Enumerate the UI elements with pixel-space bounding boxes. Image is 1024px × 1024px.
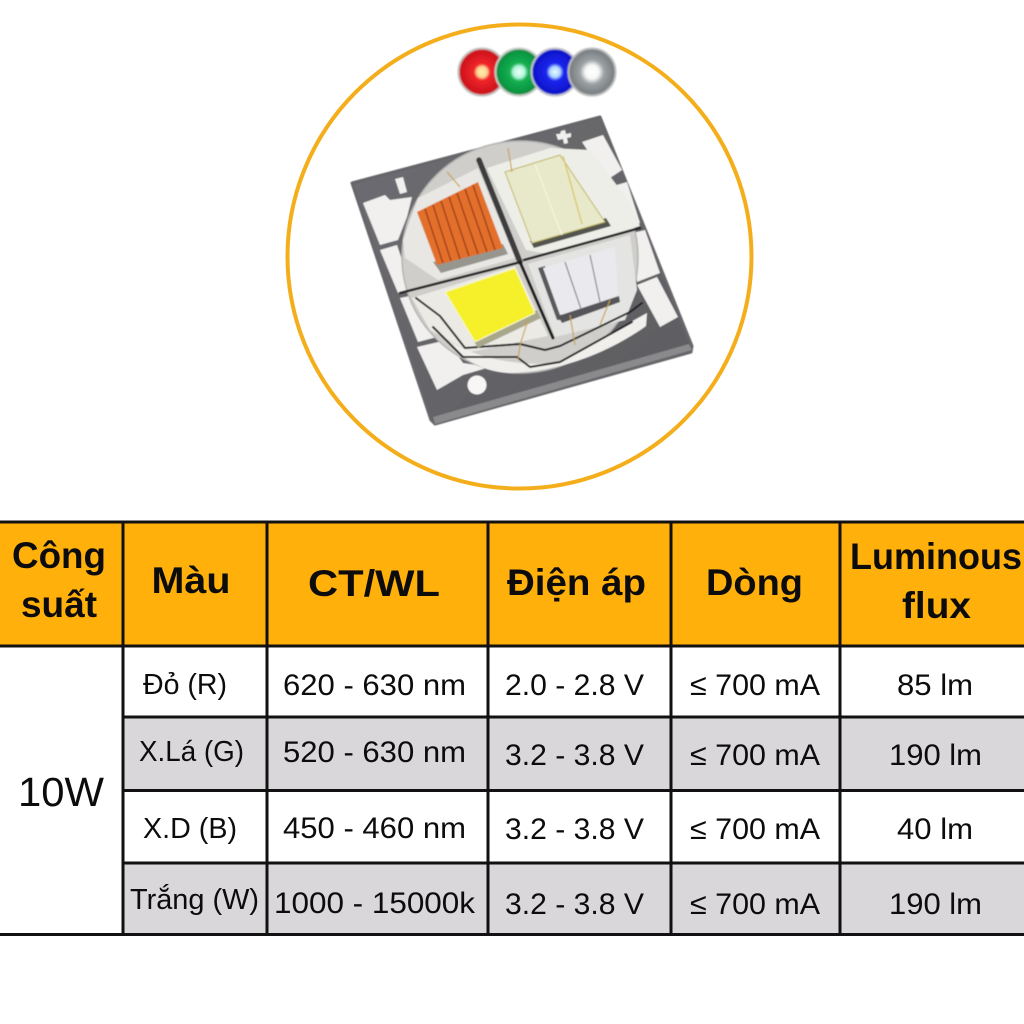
row: blue: 40 lm	[897, 813, 973, 846]
row: red	[143, 669, 973, 702]
dome lens	[402, 141, 638, 373]
row: blue: 450 - 460 nm	[283, 812, 466, 845]
icon: red LED	[458, 48, 506, 96]
chip body	[352, 117, 692, 424]
icon: green LED	[496, 48, 542, 96]
metal quadrant bottom right	[528, 235, 637, 337]
row: white: 190 lm	[889, 888, 982, 921]
metal quadrant top right	[487, 148, 640, 254]
bond wires	[447, 148, 610, 360]
row: green	[139, 736, 982, 772]
row: blue: ≤ 700 mA	[690, 813, 820, 846]
icon: four LED colour dots	[458, 48, 616, 96]
row 4 shading	[123, 863, 1024, 934]
corner and edge pads	[363, 130, 678, 390]
row: white	[130, 883, 982, 921]
LED chip illustration	[352, 117, 692, 424]
row: red: 2.0 - 2.8 V	[505, 669, 644, 702]
metal quadrant top left	[403, 168, 515, 280]
table grid lines	[0, 522, 1024, 934]
header: CT/WL: CT/WL	[308, 563, 440, 604]
orange die ribs	[425, 185, 495, 263]
row: red: 85 lm	[897, 669, 973, 702]
chip lower lip	[433, 344, 692, 424]
row: green: 190 lm	[889, 739, 982, 772]
icon: blue LED	[532, 48, 578, 96]
header: Công suất: Công	[12, 535, 106, 576]
metal traces crescent	[447, 313, 647, 373]
icon: white LED	[568, 48, 616, 96]
row: white: 1000 - 15000k	[274, 887, 476, 920]
header band	[0, 522, 1024, 646]
row: red: 620 - 630 nm	[283, 669, 466, 702]
white die dividers	[565, 255, 600, 309]
header: Điện áp: Điện áp	[507, 562, 646, 603]
power value: 10W	[18, 769, 104, 815]
die: yellow	[445, 268, 535, 342]
header: Màu: Màu	[152, 560, 230, 601]
row: blue: X.D (B)	[143, 813, 237, 845]
die: white	[543, 247, 618, 315]
hole	[468, 376, 486, 394]
header: Công suất second line: suất	[21, 584, 97, 625]
die: cream	[505, 155, 605, 243]
product circle outline	[288, 24, 752, 488]
row: white: 3.2 - 3.8 V	[505, 888, 644, 921]
row: green: 520 - 630 nm	[283, 736, 466, 769]
row: green: X.Lá (G)	[139, 736, 244, 768]
row: blue: 3.2 - 3.8 V	[505, 813, 644, 846]
row: green: 3.2 - 3.8 V	[505, 739, 644, 772]
row: white: ≤ 700 mA	[690, 888, 820, 921]
row: red: Đỏ (R)	[143, 669, 227, 701]
die shadows	[433, 244, 508, 273]
dark cross lines and traces	[400, 160, 642, 367]
die: orange	[417, 182, 503, 265]
row: red: ≤ 700 mA	[690, 669, 820, 702]
row: white: Trắng (W)	[130, 883, 259, 916]
row 2 shading	[123, 717, 1024, 790]
header: Dòng: Dòng	[706, 562, 803, 603]
table	[0, 522, 1024, 934]
metal quadrant bottom left	[412, 266, 548, 352]
row: green: ≤ 700 mA	[690, 739, 820, 772]
header: Luminous: Luminous	[850, 536, 1022, 577]
header: flux: flux	[902, 585, 971, 626]
cream die detail	[535, 156, 582, 235]
row: blue	[143, 812, 973, 846]
